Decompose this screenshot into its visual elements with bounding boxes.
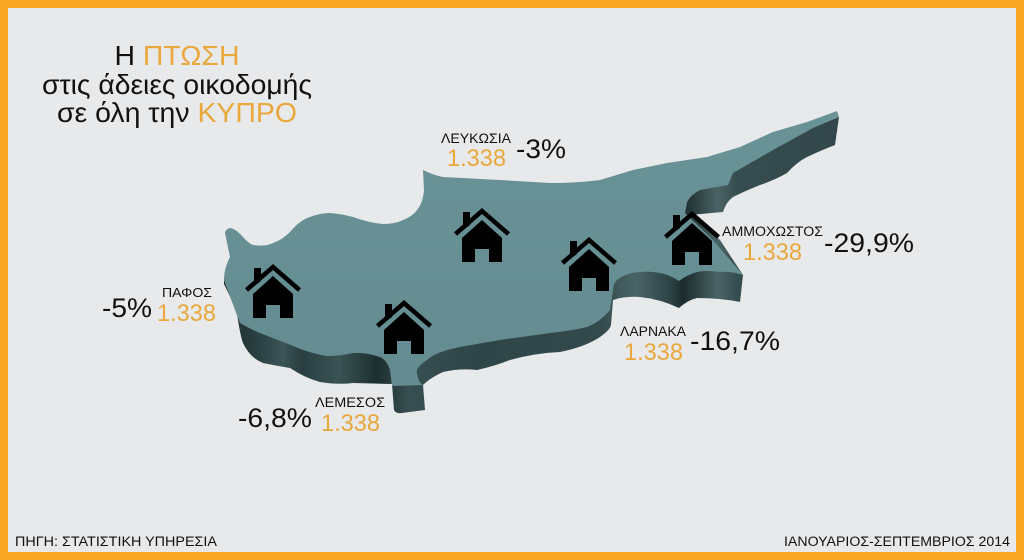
house icon: Πάφος [246, 267, 300, 318]
label: Λευκωσία: ΛΕΥΚΩΣΙΑ [441, 131, 511, 146]
label: Πάφος: ΠΑΦΟΣ [162, 285, 212, 300]
source note: ΠΗΓΗ: ΣΤΑΤΙΣΤΙΚΗ ΥΠΗΡΕΣΙΑ [15, 534, 217, 549]
label: Αμμόχωστος [722, 224, 914, 266]
title: Η ΠΤΩΣΗ [114, 40, 240, 71]
label: Λεμεσός: 1.338 [321, 410, 380, 437]
label: Λάρνακα: 1.338 [624, 339, 683, 366]
label: Λάρνακα [620, 324, 780, 366]
house icon: Λευκωσία [456, 211, 508, 262]
label: Πάφος [102, 285, 216, 327]
label: Λευκωσία: -3% [516, 134, 566, 164]
label: Πάφος: 1.338 [157, 300, 216, 327]
map side wall [224, 117, 839, 413]
house icon: Λάρνακα [562, 240, 616, 291]
label: Λάρνακα: ΛΑΡΝΑΚΑ [620, 324, 686, 339]
label: Λεμεσός: ΛΕΜΕΣΟΣ [315, 395, 385, 410]
label: Λεμεσός [238, 395, 385, 437]
label: Λεμεσός: -6,8% [238, 403, 312, 433]
label: Αμμόχωστος: 1.338 [743, 239, 802, 266]
label: Λευκωσία: 1.338 [447, 145, 506, 172]
title: σε όλη την ΚΥΠΡΟ [57, 97, 297, 128]
label: Λευκωσία [441, 131, 566, 172]
title: στις άδειες οικοδομής [42, 69, 312, 100]
map top surface [224, 111, 839, 386]
house icon: Αμμόχωστος [666, 214, 718, 265]
house icon: Λεμεσός [378, 303, 430, 354]
date note: ΙΑΝΟΥΑΡΙΟΣ-ΣΕΠΤΕΜΒΡΙΟΣ 2014 [784, 534, 1011, 549]
label: Αμμόχωστος: -29,9% [824, 228, 914, 258]
label: Πάφος: -5% [102, 293, 152, 323]
map of Cyprus [224, 111, 839, 413]
label: Λάρνακα: -16,7% [690, 326, 780, 356]
label: Αμμόχωστος: ΑΜΜΟΧΩΣΤΟΣ [722, 224, 823, 239]
title [42, 40, 312, 128]
